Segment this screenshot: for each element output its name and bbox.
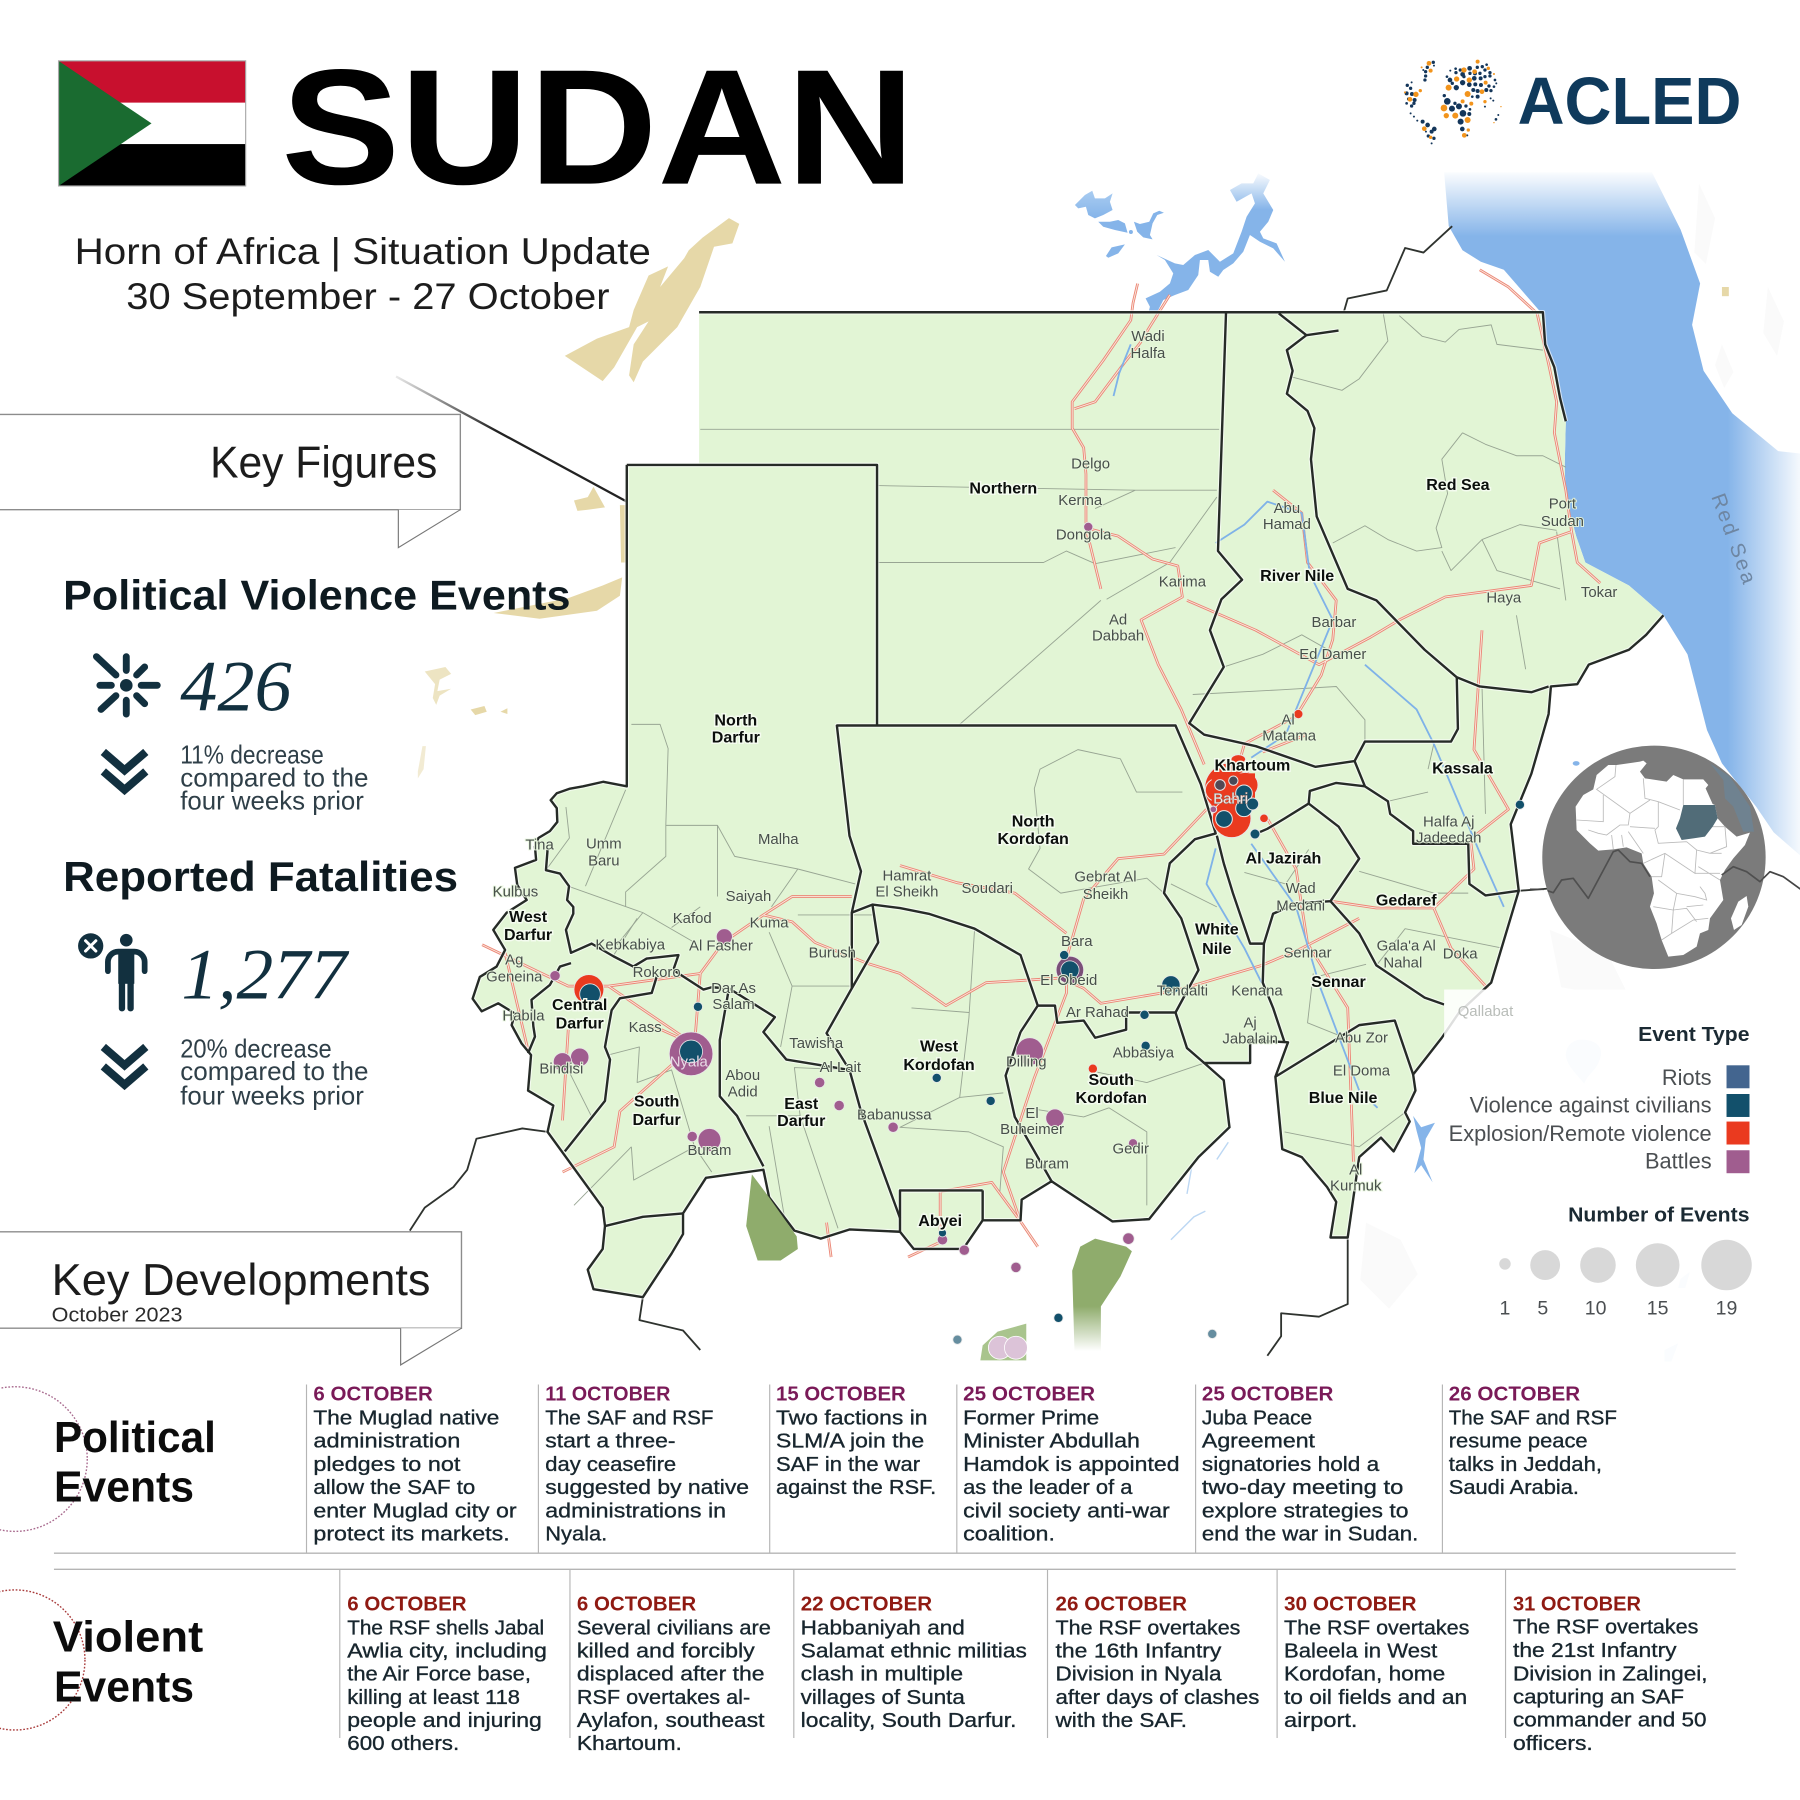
- legend: number of events: 10: [1585, 1297, 1607, 1319]
- violent event: 22 October: 22 OCTOBER: [801, 1593, 932, 1616]
- parks: [746, 1174, 1132, 1360]
- place labels: El Doma: [1333, 1063, 1391, 1080]
- legend: number of events: [1499, 1203, 1752, 1319]
- violent event: 6 October (al-Aylafon): killed and forcibly: [577, 1640, 756, 1663]
- place labels: Barbar: [1312, 614, 1356, 631]
- state boundaries: [473, 312, 1663, 1297]
- icon: burst: [96, 657, 157, 714]
- place labels: South: [634, 1093, 679, 1111]
- panel: political violence events: Political Violence Events: [63, 573, 571, 619]
- place labels: Sennar: [1283, 944, 1332, 961]
- neighbouring borders: [410, 226, 1550, 1356]
- country fill: Sudan: [473, 312, 1663, 1297]
- title: SUDAN: [281, 35, 915, 219]
- political event: 25 October (Hamdok): civil society anti-war: [963, 1500, 1170, 1523]
- change text: [180, 1035, 368, 1110]
- place labels: Sheikh: [1083, 886, 1128, 903]
- Zalingei: [574, 975, 604, 1004]
- place labels: Dabbah: [1092, 628, 1144, 645]
- violent event: 22 October: locality, South Darfur.: [801, 1709, 1017, 1732]
- legend: number of events: 5: [1537, 1297, 1548, 1319]
- place labels: Geneina: [486, 969, 543, 986]
- place labels: North: [1012, 813, 1055, 831]
- place labels: Baru: [588, 853, 620, 870]
- political event: 25 October (Hamdok): as the leader of a: [963, 1476, 1133, 1499]
- violent event: 6 October (al-Aylafon): [577, 1593, 771, 1755]
- place labels: Delgo: [1071, 455, 1110, 472]
- place labels: Darfur: [556, 1015, 604, 1033]
- political event: 11 October: suggested by native: [545, 1476, 749, 1499]
- violent event: 26 October: the 16th Infantry: [1056, 1640, 1222, 1663]
- change text: 20% decrease: [180, 1035, 332, 1063]
- violent event: 6 October (Jabal Awlia): The RSF shells Jabal: [347, 1617, 544, 1640]
- El Obeid: [1056, 956, 1084, 984]
- place labels: Nile: [1202, 940, 1232, 958]
- place labels: Kebkabiya: [595, 936, 666, 953]
- panel: reported fatalities: Reported Fatalities: [63, 854, 458, 900]
- locality boundaries: [548, 313, 1566, 1228]
- Lake Nasser and lakes: [1075, 173, 1690, 1361]
- place labels: Nyala: [670, 1053, 709, 1070]
- banner: Key Figures: Key Figures: [210, 438, 437, 488]
- place labels: Ad: [1109, 611, 1127, 628]
- violent event: 6 October (Jabal Awlia): 6 OCTOBER: [347, 1593, 467, 1616]
- place labels: Doka: [1443, 946, 1478, 963]
- political event: 15 October: SLM/A join the: [776, 1430, 924, 1453]
- political event: 6 October: 6 OCTOBER: [313, 1383, 433, 1406]
- place labels: Bindisi: [539, 1060, 583, 1077]
- legend: number of events: Number of Events: [1568, 1203, 1749, 1226]
- heading: Political Events: Events: [54, 1464, 194, 1512]
- violent event: 22 October: [801, 1593, 1027, 1732]
- place labels: Gedaref: [1376, 892, 1437, 910]
- change text: [180, 741, 368, 815]
- political event: 25 October (Hamdok): Former Prime: [963, 1407, 1099, 1430]
- place labels: Rokoro: [633, 964, 681, 981]
- place labels: Sennar: [1311, 973, 1366, 991]
- place labels: Al: [1281, 711, 1295, 728]
- legend: event type: Battles: [1645, 1149, 1712, 1174]
- political event: 11 October: day ceasefire: [545, 1453, 676, 1476]
- violent event: 31 October: capturing an SAF: [1513, 1686, 1684, 1709]
- flag of Sudan: [59, 61, 246, 186]
- place labels: Dongola: [1056, 527, 1112, 544]
- change text: four weeks prior: [180, 1082, 364, 1110]
- political event: 26 October: 26 OCTOBER: [1449, 1383, 1580, 1406]
- ACLED logo: [1404, 60, 1741, 144]
- icon: person with x badge: [78, 933, 145, 1011]
- violence against civilians: [693, 800, 1524, 1344]
- violent event: 6 October (Jabal Awlia): Awlia city, including: [347, 1640, 547, 1663]
- political event: 11 October: [545, 1383, 749, 1546]
- place labels: Soudari: [962, 880, 1013, 897]
- place labels: Haya: [1486, 590, 1522, 607]
- violent event: 6 October (al-Aylafon): Aylafon, southeast: [577, 1709, 765, 1732]
- violent event: 22 October: villages of Sunta: [801, 1686, 965, 1709]
- Red Sea and water: [1435, 170, 1800, 855]
- violent event: 30 October: Kordofan, home: [1284, 1663, 1445, 1686]
- banner: Key Developments: October 2023: [52, 1303, 183, 1326]
- violent event: 30 October: 30 OCTOBER: [1284, 1593, 1417, 1616]
- political event: 26 October: resume peace: [1449, 1430, 1588, 1453]
- political event: 26 October: [1449, 1383, 1617, 1499]
- place labels: Buram: [687, 1142, 731, 1159]
- icon: double chevron down: [103, 1047, 146, 1085]
- change text: compared to the: [180, 764, 368, 792]
- place labels: Blue Nile: [1309, 1089, 1378, 1107]
- place labels: Ag: [505, 951, 523, 968]
- place labels: Burush: [809, 944, 856, 961]
- place labels: Kurmuk: [1330, 1177, 1382, 1194]
- political event: 25 October (Juba): 25 OCTOBER: [1202, 1383, 1333, 1406]
- subtitle: 30 September - 27 October: [126, 276, 610, 317]
- place labels: Al Fasher: [689, 938, 753, 955]
- explosions: [1088, 709, 1303, 1073]
- political event: 15 October: 15 OCTOBER: [776, 1383, 906, 1406]
- place labels: Darfur: [712, 729, 760, 747]
- political event: 11 October: The SAF and RSF: [545, 1407, 713, 1430]
- political event: 6 October: [313, 1383, 517, 1546]
- political event: 11 October: 11 OCTOBER: [545, 1383, 670, 1406]
- place labels: Abu Zor: [1335, 1029, 1388, 1046]
- faint terrain: [1360, 184, 1784, 1343]
- legend: event type: Riots: [1662, 1065, 1712, 1090]
- Nyala: [669, 1032, 713, 1076]
- Khartoum cluster: [1205, 755, 1268, 839]
- political event: 25 October (Juba): [1202, 1383, 1418, 1546]
- legend: event type: Violence against civilians: [1470, 1092, 1712, 1117]
- banner: Key Developments: [0, 1232, 461, 1365]
- place labels: Abou: [725, 1067, 760, 1084]
- place labels: Ed Damer: [1299, 646, 1366, 663]
- place labels: West: [509, 908, 548, 926]
- place labels: Nahal: [1383, 955, 1422, 972]
- place labels: Central: [552, 996, 607, 1014]
- violent event: 6 October (al-Aylafon): Several civilians are: [577, 1617, 771, 1640]
- place labels: Darfur: [777, 1112, 825, 1130]
- legend: number of events: 1: [1500, 1297, 1510, 1319]
- place labels: Port: [1549, 496, 1577, 513]
- place labels: Buram: [1025, 1156, 1069, 1173]
- ACLED logo: ACLED: [1518, 65, 1741, 139]
- place labels: Al Lait: [820, 1059, 862, 1076]
- globe inset: Africa locator: [1530, 746, 1800, 969]
- place labels: Red Sea: [1426, 476, 1491, 494]
- violent event: 26 October: after days of clashes: [1056, 1686, 1259, 1709]
- violent event: 30 October: Baleela in West: [1284, 1640, 1438, 1663]
- political event: 26 October: Saudi Arabia.: [1449, 1476, 1579, 1499]
- violent event: 31 October: 31 OCTOBER: [1513, 1593, 1641, 1616]
- violent event: 31 October: The RSF overtakes: [1513, 1616, 1698, 1639]
- change text: four weeks prior: [180, 787, 364, 815]
- violent event: 6 October (Jabal Awlia): people and injuring: [347, 1709, 542, 1732]
- violent event: 6 October (al-Aylafon): Khartoum.: [577, 1732, 682, 1755]
- panel: reported fatalities: [63, 854, 458, 1110]
- political event: 6 October: The Muglad native: [313, 1407, 499, 1430]
- political event: 11 October: start a three-: [545, 1430, 676, 1453]
- place labels: Bahri: [1213, 791, 1248, 808]
- heading: Political Events: [0, 1387, 216, 1531]
- place labels: Darfur: [633, 1111, 681, 1129]
- text: Qallabat: [1458, 1003, 1514, 1020]
- place labels: Kuma: [750, 915, 789, 932]
- place labels: West: [920, 1038, 959, 1056]
- place labels: Hamrat: [882, 867, 932, 884]
- place labels: Dilling: [1006, 1053, 1047, 1070]
- banner: Key Figures: [0, 414, 460, 548]
- place labels: Kerma: [1058, 492, 1103, 509]
- place labels: Kordofan: [997, 830, 1069, 848]
- political event: 6 October: allow the SAF to: [313, 1476, 475, 1499]
- place labels: River Nile: [1260, 567, 1334, 585]
- place labels: Dar As: [711, 980, 756, 997]
- violent event: 31 October: officers.: [1513, 1732, 1593, 1755]
- violent event: 26 October: Division in Nyala: [1056, 1663, 1222, 1686]
- legend: number of events: 19: [1716, 1297, 1737, 1319]
- place labels: Jadeedah: [1416, 830, 1481, 847]
- political event: 15 October: Two factions in: [776, 1407, 928, 1430]
- place labels: Babanussa: [857, 1106, 932, 1123]
- place labels: Gala'a Al: [1377, 938, 1436, 955]
- place labels: Hamad: [1263, 516, 1311, 533]
- legend: event type: Event Type: [1638, 1023, 1749, 1046]
- place labels: Gebrat Al: [1074, 869, 1137, 886]
- violent event: 6 October (al-Aylafon): displaced after the: [577, 1663, 765, 1686]
- violent event: 22 October: Habbaniyah and: [801, 1617, 965, 1640]
- violent event: 6 October (Jabal Awlia): [347, 1593, 547, 1755]
- icon: double chevron down: [103, 752, 146, 790]
- political event: 26 October: The SAF and RSF: [1449, 1407, 1617, 1430]
- place labels: Sudan: [1541, 513, 1584, 530]
- place labels: Matama: [1262, 727, 1317, 744]
- place labels: Umm: [586, 835, 622, 852]
- change text: compared to the: [180, 1058, 368, 1086]
- lines: northern boundary: [396, 172, 699, 502]
- place labels: Tokar: [1581, 584, 1617, 601]
- violent event: 26 October: with the SAF.: [1054, 1709, 1187, 1732]
- place labels: Adid: [728, 1083, 758, 1100]
- place labels: Abbasiya: [1113, 1044, 1175, 1061]
- place labels: Al Jazirah: [1245, 849, 1321, 867]
- political event: 25 October (Juba): two-day meeting to: [1202, 1476, 1403, 1499]
- political event: 25 October (Hamdok): [963, 1383, 1180, 1546]
- place labels: Tina: [525, 836, 554, 853]
- label: Red Sea: Red Sea: [1706, 490, 1761, 589]
- place labels: El Sheikh: [875, 884, 938, 901]
- violent event: 6 October (al-Aylafon): 6 OCTOBER: [577, 1593, 696, 1616]
- political event: 25 October (Juba): Agreement: [1202, 1430, 1315, 1453]
- violent event: 31 October: commander and 50: [1513, 1709, 1706, 1732]
- violent event: 22 October: Salamat ethnic militias: [801, 1640, 1027, 1663]
- map: Sudan political violence events: [396, 170, 1800, 1361]
- political event: 26 October: talks in Jeddah,: [1449, 1453, 1602, 1476]
- place labels: Habila: [502, 1008, 545, 1025]
- violent event: 31 October: Division in Zalingei,: [1513, 1663, 1708, 1686]
- place labels: Salam: [712, 996, 755, 1013]
- violent event: 30 October: The RSF overtakes: [1284, 1617, 1469, 1640]
- political event: 11 October: administrations in: [545, 1500, 726, 1523]
- event points: [550, 522, 1524, 1359]
- violent event: 30 October: to oil fields and an: [1284, 1686, 1467, 1709]
- place labels: Karima: [1159, 574, 1207, 591]
- figure: 426: 426: [180, 647, 292, 727]
- rivers: [1114, 344, 1504, 1108]
- political event: 25 October (Hamdok): Hamdok is appointed: [963, 1453, 1180, 1476]
- heading: Violent Events: Violent: [53, 1613, 203, 1661]
- place labels: El Obeid: [1040, 972, 1097, 989]
- heading: Violent Events: Events: [54, 1663, 194, 1711]
- place labels: Khartoum: [1214, 756, 1290, 774]
- violent event: 26 October: 26 OCTOBER: [1056, 1593, 1187, 1616]
- political event: 25 October (Hamdok): 25 OCTOBER: [963, 1383, 1095, 1406]
- place labels: Tendalti: [1157, 982, 1208, 999]
- place labels: Kafod: [673, 910, 712, 927]
- place labels: Northern: [969, 480, 1037, 498]
- political event: 25 October (Juba): end the war in Sudan.: [1202, 1523, 1418, 1546]
- legend backdrop: [1444, 990, 1800, 1368]
- place labels: Gedir: [1113, 1141, 1149, 1158]
- place labels: Halfa: [1131, 345, 1166, 362]
- place labels: Abyei: [918, 1212, 962, 1230]
- banner: Key Developments: Key Developments: [52, 1255, 430, 1305]
- violent event: 26 October: The RSF overtakes: [1056, 1617, 1240, 1640]
- heading: Violent Events: [0, 1590, 203, 1730]
- place labels: Al: [1349, 1161, 1362, 1178]
- violent event: 22 October: clash in multiple: [801, 1663, 963, 1686]
- political event: 6 October: pledges to not: [313, 1453, 461, 1476]
- political event: 25 October (Hamdok): Minister Abdullah: [963, 1430, 1140, 1453]
- violent event: 30 October: airport.: [1284, 1709, 1357, 1732]
- violent event: 6 October (Jabal Awlia): 600 others.: [347, 1732, 459, 1755]
- place labels: Darfur: [504, 926, 552, 944]
- subtitle: Horn of Africa | Situation Update: [75, 231, 651, 272]
- place labels: North: [714, 712, 757, 730]
- place labels: Saiyah: [726, 888, 771, 905]
- violent event: 26 October: [1054, 1593, 1259, 1732]
- place labels: Kulbus: [493, 884, 538, 901]
- political event: 6 October: protect its markets.: [313, 1523, 510, 1546]
- subtitle: [75, 231, 651, 317]
- heading: Political Events: Political: [54, 1414, 216, 1462]
- place labels: El: [1025, 1105, 1039, 1122]
- legend: event type: [1449, 1023, 1749, 1174]
- place labels: East: [784, 1095, 819, 1113]
- place labels: Buheimer: [1000, 1121, 1064, 1138]
- place labels: Medani: [1276, 897, 1325, 914]
- violent event: 6 October (Jabal Awlia): the Air Force base,: [347, 1663, 531, 1686]
- legend: number of events: 15: [1647, 1297, 1669, 1319]
- figure: 1,277: 1,277: [181, 935, 350, 1015]
- place labels: Wad: [1286, 880, 1316, 897]
- political event: 11 October: Nyala.: [545, 1523, 607, 1546]
- battles: [550, 522, 1138, 1273]
- political event: 6 October: enter Muglad city or: [313, 1500, 517, 1523]
- violent event: 31 October: [1513, 1593, 1708, 1755]
- panel: political violence events: [63, 573, 571, 815]
- roads: [482, 270, 1600, 1257]
- violent event: 30 October: [1284, 1593, 1469, 1732]
- political event: 25 October (Juba): Juba Peace: [1202, 1407, 1312, 1430]
- place labels: Halfa Aj: [1423, 814, 1474, 831]
- legend: event type: Explosion/Remote violence: [1449, 1121, 1712, 1146]
- violent event: 6 October (al-Aylafon): RSF overtakes al-: [577, 1686, 750, 1709]
- place labels: White: [1195, 920, 1239, 938]
- political event: 6 October: administration: [313, 1430, 460, 1453]
- political event: 15 October: SAF in the war: [776, 1453, 920, 1476]
- place labels: [486, 328, 1617, 1230]
- timeline dividers: [54, 1384, 1736, 1738]
- change text: 11% decrease: [180, 741, 324, 769]
- political event: 15 October: [776, 1383, 936, 1499]
- place labels: Kassala: [1432, 760, 1494, 778]
- place labels: Wadi: [1131, 328, 1165, 345]
- political event: 25 October (Hamdok): coalition.: [963, 1523, 1055, 1546]
- place labels: Abu: [1274, 500, 1300, 517]
- place labels: Kenana: [1231, 982, 1283, 999]
- violent event: 31 October: the 21st Infantry: [1513, 1639, 1677, 1662]
- place labels: Jabalain: [1222, 1030, 1278, 1047]
- political event: 25 October (Juba): signatories hold a: [1202, 1453, 1380, 1476]
- place labels: Kordofan: [1076, 1089, 1147, 1107]
- place labels: Tawisha: [789, 1035, 844, 1052]
- place labels: Kordofan: [903, 1056, 975, 1074]
- political event: 15 October: against the RSF.: [776, 1476, 936, 1499]
- place labels: Kass: [629, 1019, 662, 1036]
- violent event: 6 October (Jabal Awlia): killing at least 118: [347, 1686, 520, 1709]
- political event: 25 October (Juba): explore strategies to: [1202, 1500, 1409, 1523]
- place labels: Ar Rahad: [1066, 1004, 1129, 1021]
- place labels: Bara: [1061, 933, 1093, 950]
- place labels: Aj: [1243, 1014, 1257, 1031]
- place labels: South: [1088, 1071, 1134, 1089]
- desert patches: [418, 184, 1729, 778]
- place labels: Malha: [758, 831, 799, 848]
